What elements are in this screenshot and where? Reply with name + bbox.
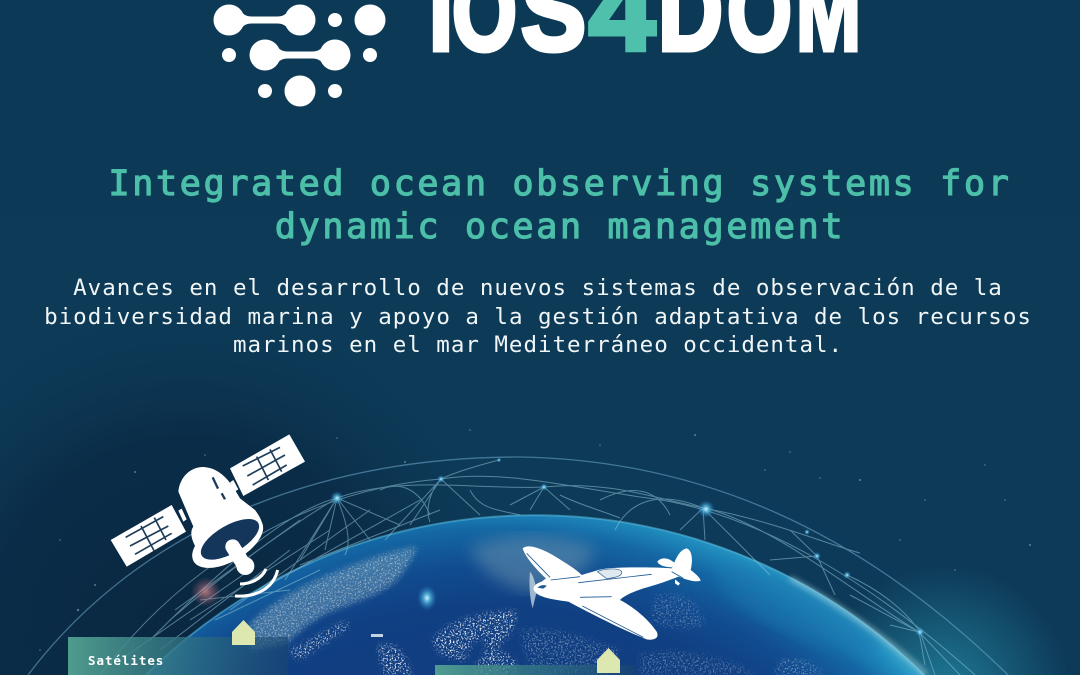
- marker: aircraft: [597, 648, 620, 673]
- icon: airplane: [523, 546, 701, 640]
- title: dynamic ocean management: [275, 207, 845, 247]
- icon: satellite: [111, 434, 305, 596]
- logo: wordmark IOS4DOM: [429, 0, 861, 74]
- label: Satélites: Satélites: [88, 653, 164, 668]
- land masses: [250, 536, 595, 650]
- label panel: aircraft: [435, 665, 635, 675]
- marker: satellites: [232, 620, 255, 645]
- city lights: [288, 594, 825, 675]
- logo: network mark: [214, 4, 386, 106]
- title: [109, 164, 1011, 247]
- globe rim highlight: [146, 515, 927, 675]
- network lines: [28, 457, 1008, 675]
- description text: Avances en el desarrollo de nuevos sistemas de observación de la: [73, 275, 1003, 301]
- description text: biodiversidad marina y apoyo a la gestión adaptativa de los recursos: [44, 304, 1032, 330]
- network nodes: [191, 458, 925, 637]
- description text: [44, 275, 1032, 358]
- title: Integrated ocean observing systems for: [109, 164, 1011, 204]
- label: Satélites: [68, 637, 288, 675]
- stars: [39, 429, 1031, 651]
- description text: marinos en el mar Mediterráneo occidental.: [233, 332, 843, 358]
- globe: [145, 515, 925, 675]
